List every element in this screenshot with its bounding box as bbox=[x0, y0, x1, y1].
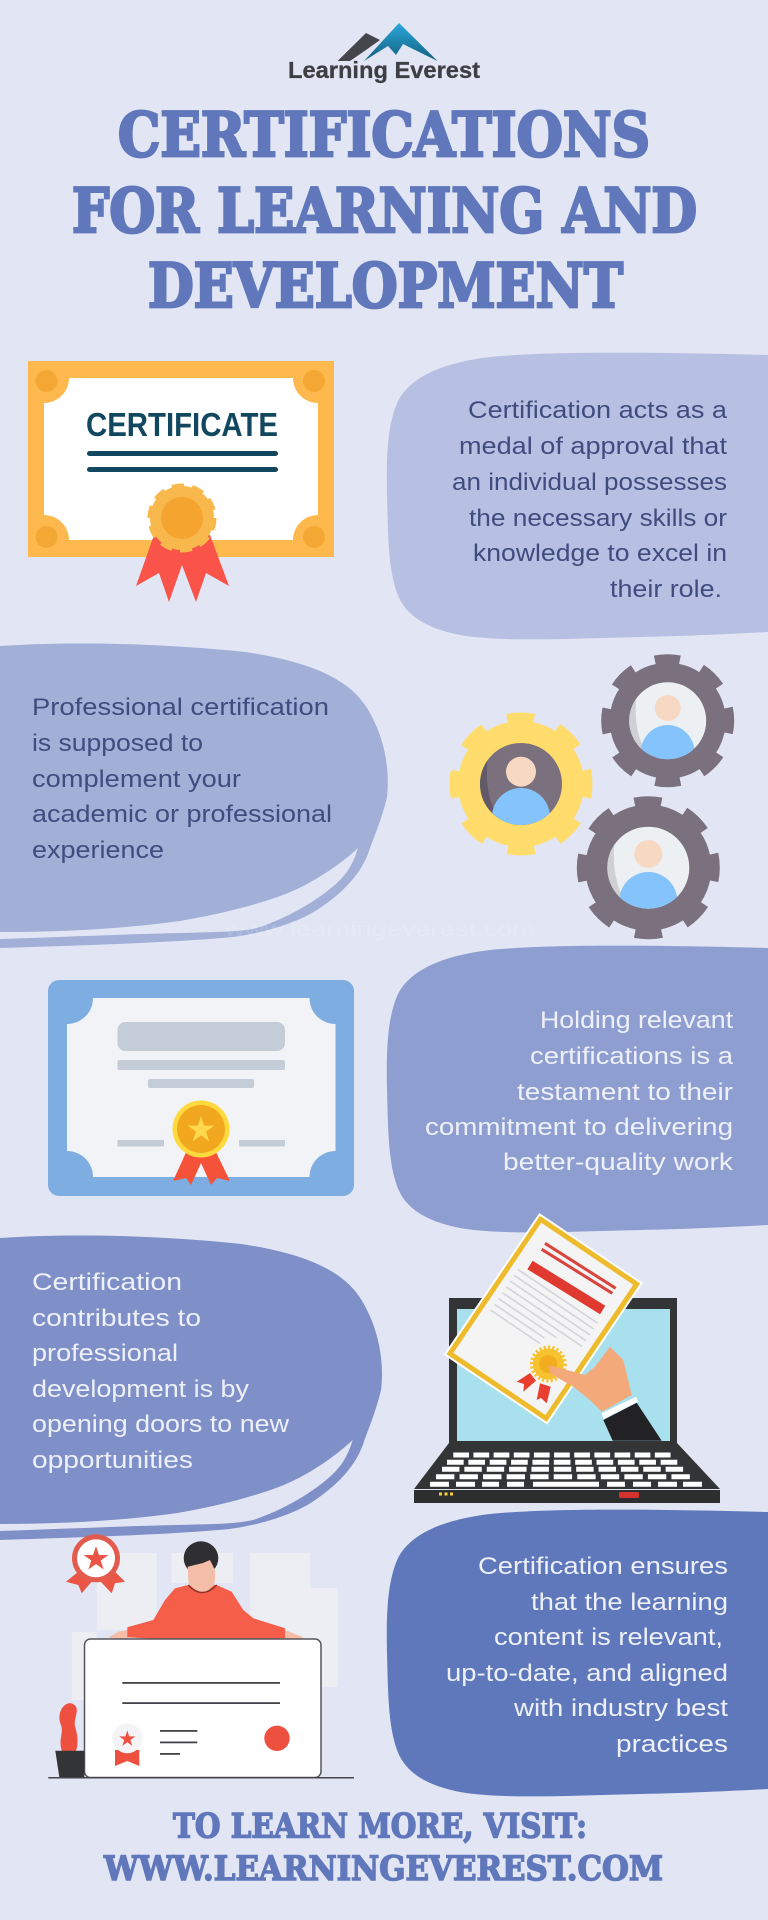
certificate red headings bbox=[530, 1243, 616, 1310]
panel: content relevant: practices bbox=[616, 1731, 728, 1758]
icon: orange certificate: CERTIFICATE bbox=[86, 406, 278, 443]
panel: content relevant: content is relevant, bbox=[494, 1624, 723, 1651]
panel: professional certification: academic or professional bbox=[32, 801, 332, 828]
footer call to action bbox=[103, 1806, 663, 1889]
watermark: www.learningeverest.com bbox=[224, 919, 535, 941]
panel: professional certification: Professional certification bbox=[32, 694, 329, 721]
panel: professional development: development is by bbox=[32, 1376, 249, 1403]
panel: content relevant: that the learning bbox=[531, 1589, 728, 1616]
panel: content relevant: with industry best bbox=[513, 1695, 728, 1722]
panel: certification medal of approval: Certification acts as a bbox=[468, 397, 728, 424]
plant bbox=[55, 1703, 84, 1777]
laptop keyboard bbox=[414, 1443, 720, 1503]
background buildings bbox=[72, 1553, 338, 1700]
hand bbox=[548, 1347, 662, 1441]
panel: holding relevant certifications bbox=[387, 946, 768, 1232]
gear: grey bottom bbox=[583, 802, 714, 933]
panel: professional development: Certification bbox=[32, 1269, 182, 1296]
panel: professional certification bbox=[0, 644, 388, 948]
panel: professional development: professional bbox=[32, 1340, 178, 1367]
panel: certification medal of approval bbox=[387, 353, 768, 639]
panel: professional development: opening doors to new bbox=[32, 1411, 290, 1438]
panel: professional certification: complement your bbox=[32, 766, 241, 793]
panel: certification medal of approval: their role. bbox=[610, 576, 722, 603]
title bbox=[72, 100, 697, 322]
panel: professional development bbox=[0, 1236, 382, 1540]
panel: holding relevant certifications: testament to their bbox=[517, 1079, 733, 1106]
panel: certification medal of approval: an individual possesses bbox=[452, 469, 727, 496]
panel: professional certification: experience bbox=[32, 837, 164, 864]
icon: laptop with certificate bbox=[414, 1213, 720, 1503]
medal bbox=[66, 1534, 125, 1593]
footer call to action: WWW.LEARNINGEVEREST.COM bbox=[103, 1849, 663, 1889]
panel: professional development: contributes to bbox=[32, 1305, 201, 1332]
laptop screen bbox=[449, 1298, 677, 1445]
gear: grey top bbox=[607, 660, 728, 781]
panel: content relevant: Certification ensures bbox=[478, 1553, 728, 1580]
panel: professional certification: is supposed to bbox=[32, 730, 203, 757]
seal and ribbon bbox=[517, 1348, 565, 1403]
logo: Learning Everest: Learning Everest bbox=[288, 57, 480, 83]
icon: blue certificate bbox=[48, 980, 354, 1196]
panel: holding relevant certifications: better-quality work bbox=[503, 1149, 734, 1176]
board bbox=[84, 1639, 321, 1778]
panel: holding relevant certifications: Holding relevant bbox=[540, 1007, 733, 1034]
panel: holding relevant certifications: certifications is a bbox=[530, 1043, 734, 1070]
footer call to action: TO LEARN MORE, VISIT: bbox=[173, 1806, 587, 1846]
icon: orange certificate bbox=[28, 361, 334, 602]
panel: holding relevant certifications: commitment to delivering bbox=[425, 1114, 733, 1141]
certificate paper bbox=[444, 1213, 643, 1425]
gear: yellow bbox=[456, 718, 586, 850]
person bbox=[108, 1541, 303, 1642]
title: DEVELOPMENT bbox=[148, 251, 623, 322]
icon: gears with people bbox=[456, 660, 728, 933]
panel: certification medal of approval: medal of approval that bbox=[459, 433, 727, 460]
panel: content relevant: up-to-date, and aligned bbox=[446, 1660, 728, 1687]
title: CERTIFICATIONS bbox=[118, 100, 650, 171]
panel: certification medal of approval: knowledge to excel in bbox=[473, 540, 727, 567]
icon: person holding certificate bbox=[48, 1534, 354, 1778]
panel: professional development: opportunities bbox=[32, 1447, 193, 1474]
panel: certification medal of approval: the necessary skills or bbox=[469, 505, 727, 532]
logo: Learning Everest bbox=[288, 23, 480, 83]
panel: content relevant bbox=[387, 1510, 768, 1796]
